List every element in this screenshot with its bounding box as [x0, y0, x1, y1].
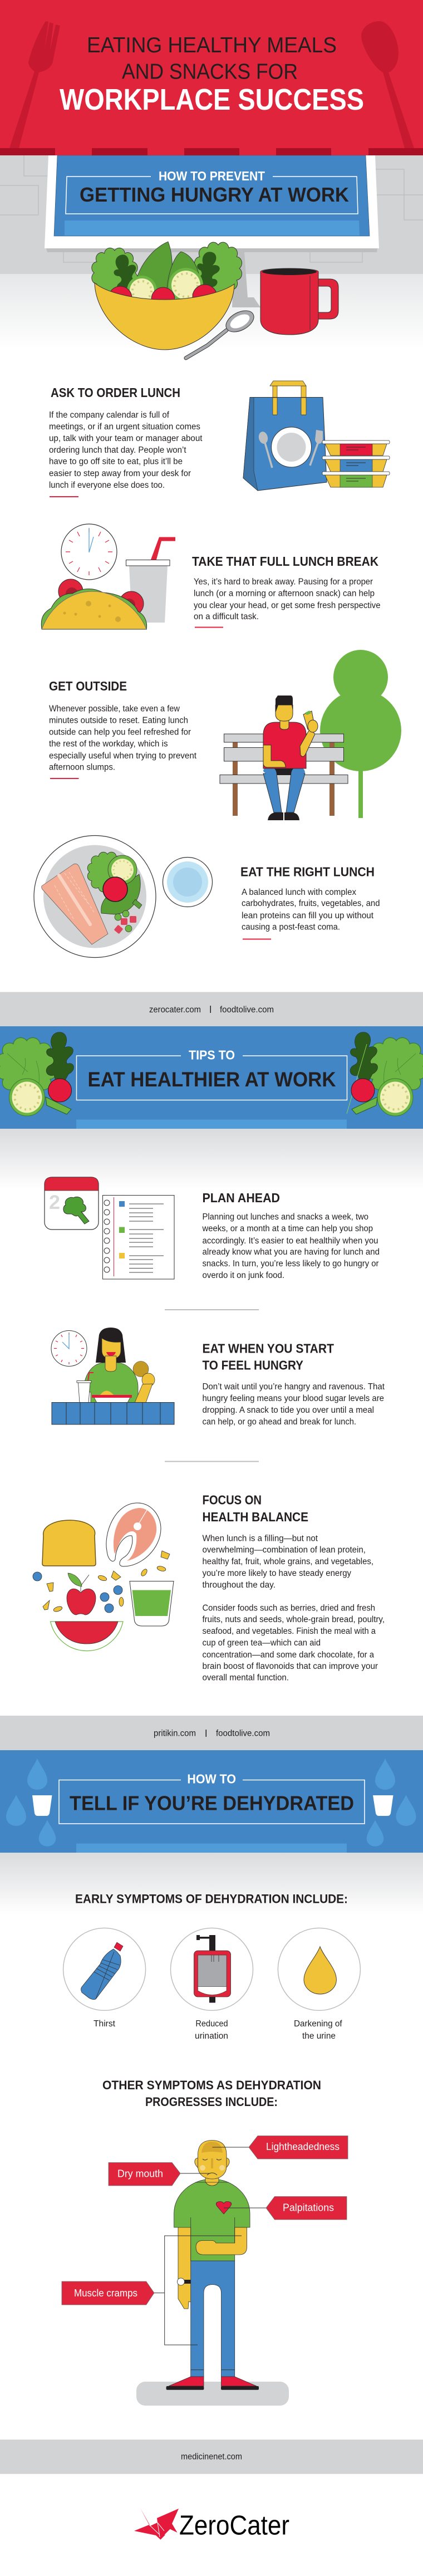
icon: taco: [41, 579, 147, 629]
icon: notebook: [102, 1195, 174, 1279]
sources bar 2: [0, 1716, 423, 1750]
body text: lunch (or a morning or afternoon snack) can help: [194, 589, 375, 598]
body text: Planning out lunches and snacks a week, two: [203, 1212, 368, 1222]
body text 2: concentration—and some dark chocolate, for a: [203, 1651, 374, 1659]
body text: you’re more likely to have steady energy: [203, 1569, 351, 1578]
icon: wall clock: [51, 1331, 87, 1367]
monitor: [45, 155, 379, 307]
icon: bench and person: [220, 696, 348, 820]
body text: have to go off site to eat, plus it’ll be: [49, 457, 183, 467]
section heading: how to prevent: GETTING HUNGRY AT WORK: [80, 183, 349, 206]
label: dry mouth: [109, 2163, 180, 2186]
body text: [49, 410, 203, 490]
body text: meetings, or if an urgent situation comes: [49, 422, 200, 432]
section heading: how to prevent: [80, 169, 349, 206]
body text: Don’t wait until you’re hangry and ravenous. That: [203, 1382, 385, 1392]
heading: [88, 1048, 336, 1091]
body text: overdo it on junk food.: [203, 1271, 284, 1280]
body text: [242, 888, 380, 932]
body text: the rest of the workday, which is: [49, 740, 168, 748]
sources bar 3: medicinenet.com: [181, 2452, 242, 2462]
icons: water drops and glasses right: [367, 1759, 416, 1847]
body text: Yes, it’s hard to break away. Pausing for a proper: [194, 577, 373, 587]
icon: yellow drop: [304, 1947, 336, 1994]
sources bar 1: foodtolive.com: [220, 1005, 274, 1015]
right arm: [196, 2227, 247, 2255]
tip: eat when you start to feel hungry: [203, 1341, 385, 1427]
body text: [194, 577, 381, 621]
body text: dropping. A snack to tide you over until a meal: [203, 1405, 374, 1415]
body text: you clear your head, or get some fresh perspective: [194, 601, 381, 610]
tip: eat when you start to feel hungry: TO FEEL HUNGRY: [203, 1358, 303, 1373]
icon: vegetables right: [347, 1032, 423, 1116]
body text: up, talk with your team or manager about: [49, 434, 203, 443]
oats: [53, 1565, 166, 1613]
heading: [70, 1772, 354, 1814]
body text: on a difficult task.: [194, 612, 259, 621]
icon: spoon on desk: [186, 306, 257, 358]
symptom: darkening of the urine: [278, 1928, 360, 2041]
body text: accordingly. It’s easier to eat healthily when you: [203, 1236, 378, 1246]
body text: [49, 704, 197, 772]
heading: other symptoms: OTHER SYMPTOMS AS DEHYDRATION: [102, 2078, 321, 2092]
icon: calendar: 2: [49, 1192, 60, 1213]
tip: take that full lunch break: TAKE THAT FULL LUNCH BREAK: [192, 554, 378, 569]
logo: ZeroCater: [134, 2508, 289, 2541]
body text: afternoon slumps.: [49, 763, 115, 772]
heading: other symptoms: [102, 2078, 321, 2109]
body text: snacks. In turn, you’re less likely to go hungry or: [203, 1259, 378, 1269]
tip: plan ahead: PLAN AHEAD: [203, 1191, 280, 1205]
sources bar 2: foodtolive.com: [216, 1729, 270, 1738]
label: muscle cramps: Muscle cramps: [74, 2288, 137, 2299]
tip: eat the right lunch: EAT THE RIGHT LUNCH: [240, 864, 375, 879]
body text: easier to step away from your desk for: [49, 469, 191, 478]
body text: can help, or go ahead and break for lunch.: [203, 1417, 356, 1427]
body text: Whenever possible, take even a few: [49, 704, 180, 714]
body text: outside can help you feel refreshed for: [49, 728, 191, 737]
body text: A balanced lunch with complex: [242, 888, 356, 897]
label: lightheadedness: Lightheadedness: [266, 2141, 340, 2152]
label: muscle cramps: [62, 2281, 154, 2305]
blueberries: [33, 1572, 122, 1613]
body text: especially useful when trying to prevent: [49, 751, 197, 761]
jeans: [191, 2261, 235, 2377]
section header: tell if dehydrated: [0, 1750, 423, 1853]
icon: salmon steak: [106, 1503, 161, 1566]
tip: eat the right lunch: [240, 864, 380, 940]
icon: drink cup: [126, 537, 175, 623]
symptom: darkening of the urine: the urine: [302, 2031, 336, 2041]
heading: EAT HEALTHIER AT WORK: [88, 1068, 336, 1091]
body text 2: Consider foods such as berries, dried and fresh: [203, 1604, 375, 1613]
body text: lean proteins can fill you up without: [242, 911, 374, 920]
icon: green smoothie: [130, 1581, 174, 1626]
tip: get outside: [49, 679, 197, 779]
body text: overwhelming—combination of lean protein,: [203, 1545, 366, 1555]
body text: causing a post-feast coma.: [242, 922, 340, 932]
sources bar 2: pritikin.com: [154, 1729, 196, 1738]
title banner: [0, 0, 423, 155]
icon: tree: [320, 650, 401, 818]
body text: throughout the day.: [203, 1580, 276, 1590]
icon: lunch bag and containers: [243, 381, 390, 491]
title text: AND SNACKS FOR: [122, 60, 298, 84]
icon: red mug: [260, 268, 338, 335]
body text: [203, 1534, 373, 1590]
sources bar 1: zerocater.com: [149, 1005, 201, 1015]
icon: origami crane: [134, 2508, 179, 2540]
icon: clock: [61, 524, 117, 580]
icon: calendar: [45, 1177, 99, 1230]
symptom: reduced urination: urination: [195, 2031, 228, 2041]
symptom: darkening of the urine: Darkening of: [294, 2019, 342, 2029]
body text: hungry feeling means your blood sugar levels are: [203, 1394, 384, 1403]
body text: weeks, or a month at a time can help you shop: [202, 1224, 373, 1233]
body text 2: [203, 1604, 385, 1683]
body text: healthy fat, fruit, whole grains, and vegetables,: [203, 1557, 373, 1566]
body text: carbohydrates, fruits, vegetables, and: [242, 899, 380, 908]
left arm: [178, 2225, 191, 2309]
logo: ZeroCater: ZeroCater: [179, 2511, 289, 2541]
sources bar 1: [0, 992, 423, 1027]
body text: When lunch is a filling—but not: [203, 1534, 318, 1544]
icon: bread: [42, 1520, 96, 1566]
heading: other symptoms: PROGRESSES INCLUDE:: [145, 2095, 278, 2109]
tip: plan ahead: [202, 1191, 380, 1280]
symptom: reduced urination: [170, 1928, 253, 2041]
section heading: how to prevent: HOW TO PREVENT: [159, 169, 265, 183]
neck: [205, 2175, 219, 2186]
body text 2: cup of green tea—which can aid: [203, 1638, 321, 1648]
icon: apple: [67, 1573, 96, 1615]
icon: spoon: [361, 21, 414, 148]
tip: ask to order lunch: [49, 385, 203, 497]
icon: vegetables left: [0, 1032, 74, 1116]
icons: water drops and glasses left: [6, 1759, 56, 1847]
body text 2: overall mental function.: [203, 1673, 289, 1683]
heading: TELL IF YOU’RE DEHYDRATED: [70, 1792, 354, 1814]
hero: office wall and desk: [0, 155, 423, 349]
symptom: reduced urination: Reduced: [195, 2019, 228, 2029]
body text: lunch if everyone else does too.: [49, 481, 165, 490]
icon: fork: [9, 21, 60, 148]
symptom: thirst: [63, 1928, 146, 2029]
tip: focus on health balance: HEALTH BALANCE: [203, 1510, 308, 1524]
body text 2: brain boost of flavonoids that can improve your: [203, 1662, 378, 1671]
body text: ordering lunch that day. People won’t: [49, 445, 186, 455]
body text 2: fruits, nuts and seeds, whole-grain bread, poultry,: [203, 1615, 385, 1624]
tip: focus on health balance: FOCUS ON: [203, 1493, 262, 1507]
shoes: [166, 2377, 259, 2390]
body text 2: seafood, and vegetables. Finish the meal with a: [203, 1627, 376, 1636]
icon: heart: [216, 2202, 232, 2214]
heading: HOW TO: [187, 1772, 236, 1786]
dried fruit pieces: [43, 1551, 170, 1610]
label: palpitations: [266, 2196, 347, 2220]
icon: salad bowl: [92, 242, 242, 350]
body text: minutes outside to reset. Eating lunch: [49, 716, 188, 726]
icon: woman eating at desk: [52, 1328, 174, 1424]
title text: [60, 33, 364, 116]
shirt: [174, 2179, 250, 2261]
leader lines: [154, 2147, 266, 2345]
body text: [203, 1382, 385, 1427]
label: palpitations: Palpitations: [283, 2202, 334, 2213]
head: [195, 2141, 229, 2179]
section header: tips to eat healthier: [0, 1026, 423, 1129]
icon: healthy food collection: [33, 1503, 174, 1651]
title text: EATING HEALTHY MEALS: [87, 33, 337, 57]
icon: urinal: [194, 1935, 230, 2002]
tip: ask to order lunch: ASK TO ORDER LUNCH: [51, 385, 180, 400]
tip: get outside: GET OUTSIDE: [49, 679, 127, 693]
heading: TIPS TO: [189, 1048, 235, 1062]
figure: dehydrated man: [166, 2141, 259, 2390]
body text: If the company calendar is full of: [49, 410, 170, 420]
platform: [136, 2382, 289, 2406]
body text: already know what you are having for lunch and: [203, 1247, 380, 1257]
icon: glass of water: [163, 858, 213, 907]
tip: take that full lunch break: [192, 554, 381, 628]
heading: early symptoms: EARLY SYMPTOMS OF DEHYDRATION INCLUDE:: [75, 1892, 348, 1906]
symptom: thirst: Thirst: [94, 2019, 116, 2029]
body text: [202, 1212, 380, 1280]
icon: water bottle: [81, 1942, 123, 2000]
icon: plate of salmon: [34, 835, 156, 958]
title text: WORKPLACE SUCCESS: [60, 83, 364, 116]
icon: watermelon: [51, 1622, 123, 1651]
label: dry mouth: Dry mouth: [117, 2168, 163, 2180]
containers: [322, 440, 390, 487]
sources bar 3: [0, 2440, 423, 2474]
tip: eat when you start to feel hungry: EAT WHEN YOU START: [203, 1341, 334, 1356]
label: lightheadedness: [249, 2136, 348, 2159]
watch: [177, 2278, 191, 2285]
tip: focus on health balance: [203, 1493, 385, 1683]
